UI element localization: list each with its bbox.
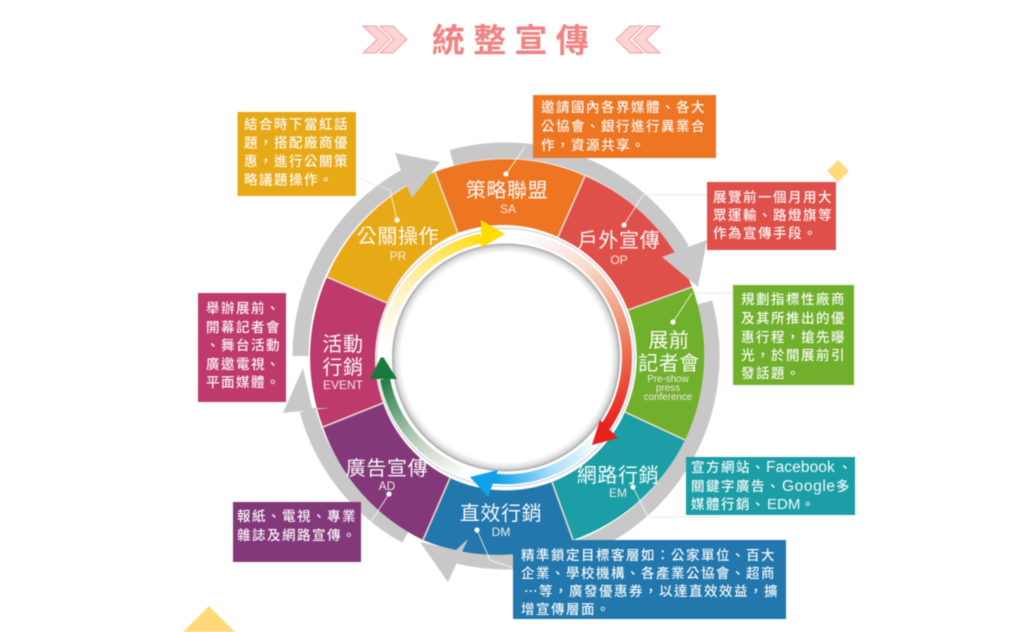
callout: public relations: 惠，進行公關策	[244, 153, 349, 169]
segment: strategic alliance	[435, 159, 585, 237]
callout: public relations: 略議題操作。	[244, 172, 334, 188]
label: pre-show: 記者會	[638, 352, 700, 375]
callout: advertising: 報紙、電視、專業	[237, 508, 357, 524]
light leader lines to callouts	[357, 178, 733, 517]
arrow: yellow	[384, 220, 505, 358]
label: AD: AD	[379, 479, 396, 493]
label: OP: OP	[610, 253, 628, 267]
callout: e-marketing: Facebook	[766, 459, 835, 476]
segment: pre-show press conference	[625, 287, 704, 440]
arrow: green	[370, 355, 462, 471]
label: SA	[466, 179, 548, 216]
callout: outdoor: 展覽前一個月用大	[713, 189, 833, 205]
label: EVENT: EVENT	[323, 378, 364, 392]
callout: e-marketing: 。	[801, 497, 816, 512]
callout: pre-show press conference: 惠行程，搶先曝	[741, 329, 846, 345]
label: EM	[577, 464, 659, 500]
callout: strategic alliance: 作，資源共享。	[541, 137, 646, 153]
label: EVENT: 活動	[322, 333, 364, 356]
callout: e-marketing: Google	[782, 478, 836, 495]
segment: outdoor	[558, 176, 692, 310]
label: DM: 直效行銷	[460, 502, 542, 525]
callout: event: 平面媒體。	[206, 375, 281, 390]
label: pre-show: conference	[644, 392, 693, 403]
label: PR: 公關操作	[357, 225, 439, 248]
leader lines and dots	[370, 147, 692, 568]
arrow: blue	[470, 400, 620, 497]
callout: direct marketing: 增宣傳層面。	[521, 601, 611, 617]
inner cycle arrows	[370, 220, 627, 497]
label: EM: EM	[609, 486, 627, 500]
label: SA: 策略聯盟	[466, 179, 548, 202]
callout: direct marketing: ⋯等，廣發優惠券，以達直效效益，擴	[524, 583, 779, 599]
label: pre-show: Pre-show	[647, 374, 690, 385]
callout: e-marketing: 宣方網站、	[691, 460, 766, 475]
callout: pre-show press conference: 光，於開展前引	[741, 347, 846, 363]
callout: event	[198, 293, 286, 402]
callout: event: 舉辦展前、	[206, 300, 281, 316]
title	[363, 22, 660, 59]
callout: strategic alliance	[533, 95, 716, 158]
wheel segments	[310, 159, 704, 555]
heading text: 統整宣傳	[432, 22, 597, 59]
callout: e-marketing: 媒體行銷、	[691, 497, 766, 512]
label: AD	[346, 457, 428, 493]
decorative diamond top right	[827, 160, 849, 182]
callout: e-marketing: EDM	[767, 496, 800, 513]
callout: e-marketing: 關鍵字廣告、	[691, 479, 781, 494]
segment: direct marketing	[423, 478, 573, 555]
segment separators	[323, 172, 692, 540]
callout: pre-show press conference: 規劃指標性廠商	[741, 291, 846, 307]
callout: public relations: 結合時下當紅話	[244, 116, 349, 132]
segment: advertising	[323, 403, 450, 540]
callout: pre-show press conference: 及其所推出的優	[741, 311, 846, 326]
callout: pre-show press conference	[733, 285, 854, 385]
centre disc	[376, 228, 635, 487]
callout: outdoor: 眾運輸、路燈旗等	[713, 207, 833, 223]
label: DM	[460, 502, 542, 539]
callout: public relations	[238, 112, 356, 196]
callout: e-marketing: 多	[836, 478, 851, 494]
callout: strategic alliance: 邀請國內各界媒體、各大	[541, 99, 706, 115]
segment: event	[310, 277, 387, 427]
decorative diamond bottom left	[183, 606, 235, 632]
icon: right chevrons	[616, 26, 660, 53]
label: OP	[578, 229, 660, 267]
label: PR	[357, 225, 439, 263]
callout: event: 廣邀電視、	[206, 356, 281, 372]
label: EM: 網路行銷	[577, 464, 659, 487]
callout: outdoor	[707, 182, 836, 250]
label: pre-show: 展前	[648, 329, 690, 352]
label: pre-show: press	[656, 383, 680, 394]
callout: strategic alliance: 公協會、銀行進行異業合	[541, 118, 706, 134]
segment labels	[322, 179, 700, 539]
callout: pre-show press conference: 發話題。	[741, 366, 801, 381]
label: AD: 廣告宣傳	[346, 457, 428, 480]
segment: public relations	[327, 172, 458, 303]
callout: public relations: 題，搭配廠商優	[244, 134, 349, 150]
callout: direct marketing: 企業、學校機構、各產業公協會、超商	[521, 565, 776, 581]
label: EVENT: 行銷	[322, 356, 364, 379]
arrow: red	[520, 237, 627, 445]
callout: outdoor: 作為宣傳手段。	[713, 225, 818, 241]
grey arrow heads	[283, 153, 707, 582]
callout: advertising	[233, 502, 361, 562]
label: pre-show	[638, 329, 700, 403]
label: EVENT	[322, 333, 364, 392]
callout: e-marketing	[686, 457, 855, 515]
segment: e-marketing	[552, 412, 685, 540]
label: SA: SA	[500, 202, 516, 216]
callout: advertising: 雜誌及網路宣傳。	[237, 527, 357, 543]
callout: event: 開幕記者會	[206, 319, 281, 335]
label: DM: DM	[492, 525, 510, 539]
callout: direct marketing: 精準鎖定目標客層如：公家單位、百大	[521, 547, 776, 563]
icon: left chevrons	[363, 26, 407, 53]
callout: direct marketing	[513, 540, 786, 619]
outer grey cycle arcs	[300, 151, 712, 561]
label: PR: PR	[390, 249, 407, 263]
label: OP: 戶外宣傳	[578, 229, 660, 252]
callout: event: 、舞台活動	[206, 337, 281, 353]
callout: e-marketing: 、	[838, 460, 853, 475]
